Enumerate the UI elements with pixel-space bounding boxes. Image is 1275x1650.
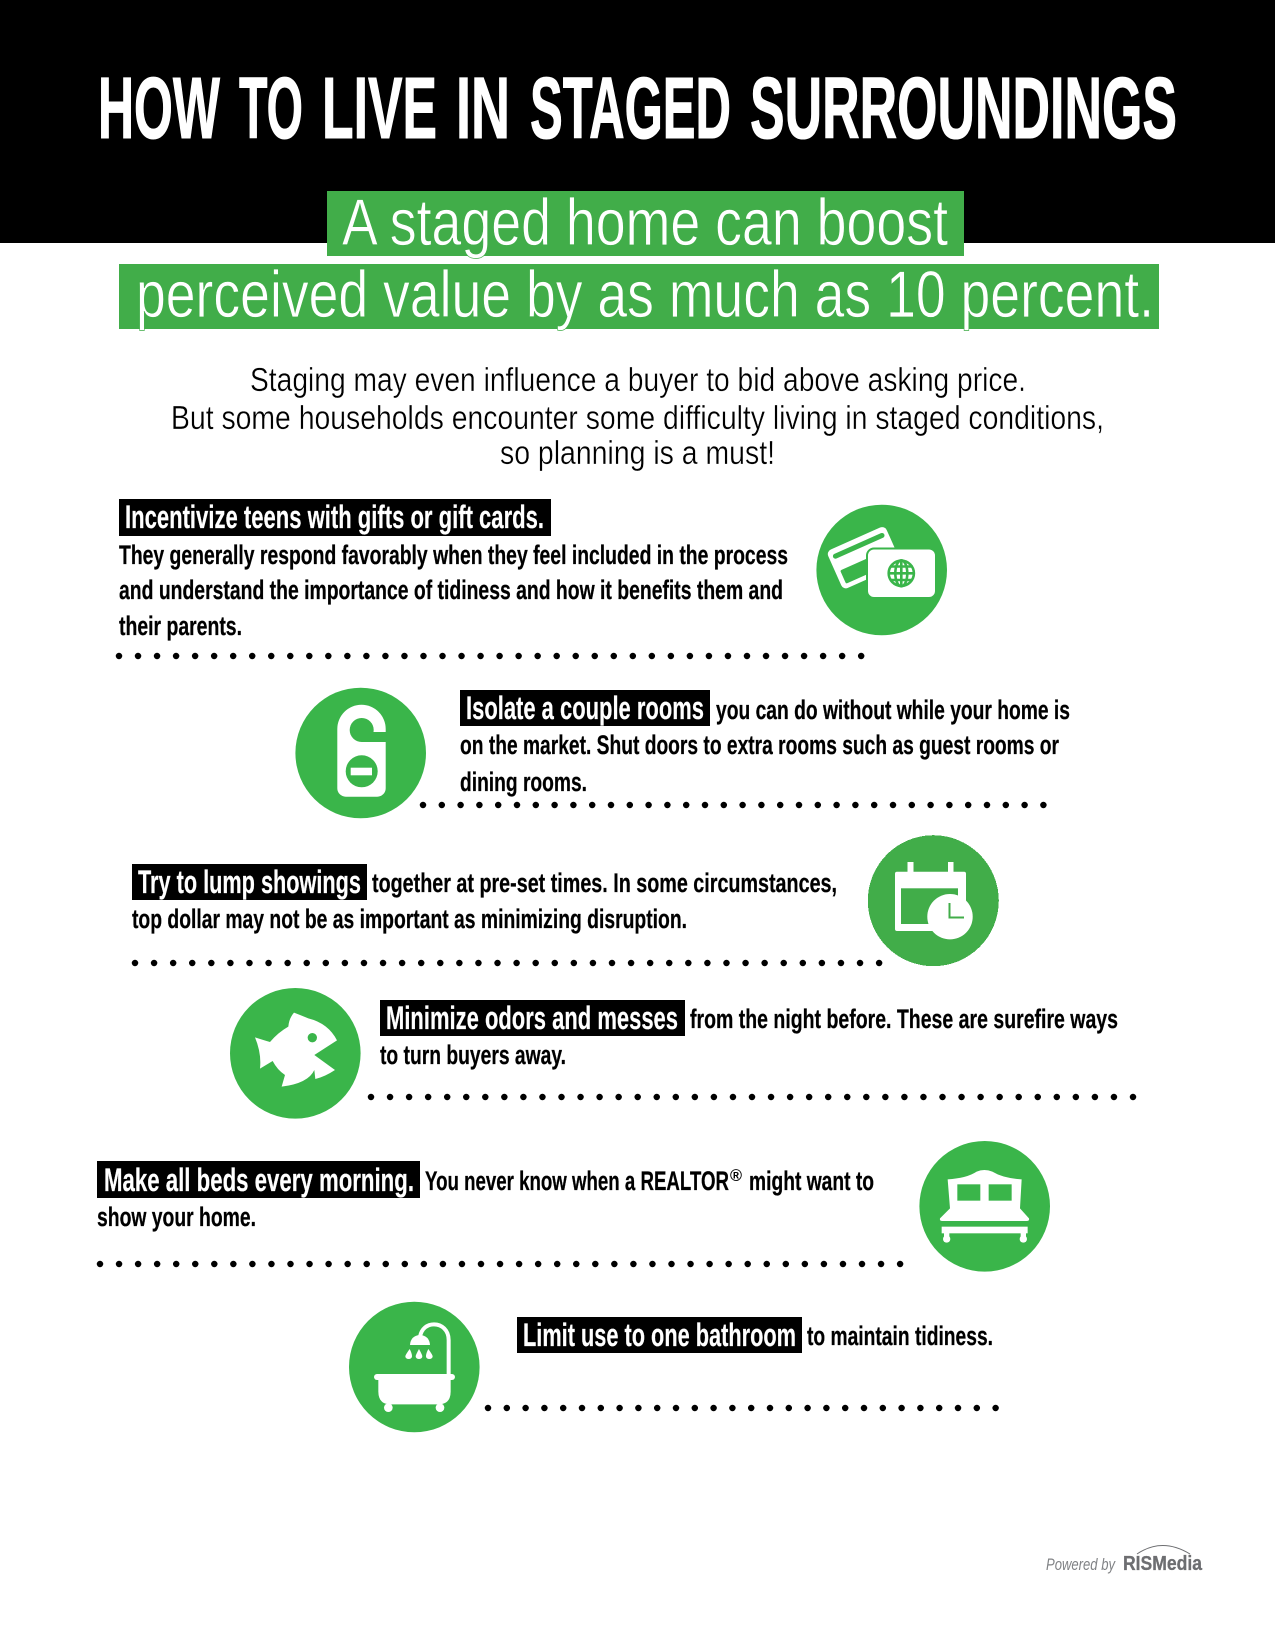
text: isolate rooms	[460, 695, 1070, 797]
dotted divider	[100, 1261, 901, 1267]
panel: one bathroom	[349, 1302, 997, 1432]
title: HOW	[98, 60, 221, 157]
intro text: Staging may even influence a buyer to bid above asking price.	[250, 361, 1026, 398]
panel: isolate rooms	[295, 688, 1070, 818]
header band	[0, 0, 1275, 243]
text: isolate rooms: dining rooms.	[460, 767, 587, 797]
dotted divider	[423, 802, 1045, 808]
dotted divider	[119, 653, 863, 659]
text: incentivize teens: their parents.	[119, 611, 242, 641]
panel: make beds	[97, 1141, 1050, 1272]
text: make beds: might want to	[749, 1166, 874, 1196]
icon: bed	[919, 1141, 1050, 1272]
text: incentivize teens: They generally respond favorably when they feel included in the process	[119, 540, 788, 570]
title: STAGED	[530, 60, 731, 157]
icon: gift cards	[816, 505, 947, 635]
heading: make beds	[97, 1161, 420, 1198]
title: IN	[456, 60, 510, 157]
text: incentivize teens	[119, 540, 788, 641]
text: make beds: You never know when a REALTOR	[425, 1166, 729, 1196]
heading: lump showings: Try to lump showings	[138, 864, 361, 900]
dotted divider	[135, 960, 880, 966]
footer logo: Powered by	[1046, 1555, 1116, 1574]
heading: isolate rooms	[460, 690, 710, 726]
text: make beds: show your home.	[97, 1202, 256, 1232]
subtitle callout: A staged home can boost	[342, 185, 948, 259]
icon: fish	[230, 988, 361, 1119]
text: incentivize teens: and understand the importance of tidiness and how it benefits them and	[119, 575, 783, 605]
text: isolate rooms: you can do without while your home is	[716, 695, 1070, 725]
text: lump showings: top dollar may not be as important as minimizing disruption.	[132, 904, 687, 934]
text: lump showings	[132, 868, 837, 934]
intro text	[171, 361, 1104, 471]
heading: minimize odors: Minimize odors and messes	[386, 1000, 678, 1036]
text: make beds: ®	[730, 1166, 742, 1185]
text: lump showings: together at pre-set times. In some circumstances,	[372, 868, 837, 898]
panel: incentivize teens	[119, 499, 947, 656]
dotted divider	[371, 1094, 1134, 1100]
panel: minimize odors	[230, 988, 1134, 1119]
heading: incentivize teens: Incentivize teens with gifts or gift cards.	[125, 499, 544, 535]
icon: calendar clock	[868, 835, 999, 966]
footer logo: RISMedia	[1123, 1553, 1203, 1575]
dotted divider	[488, 1405, 997, 1411]
text: one bathroom: to maintain tidiness.	[807, 1321, 993, 1351]
heading: incentivize teens	[119, 499, 551, 536]
heading: one bathroom	[517, 1317, 802, 1353]
text: minimize odors: from the night before. These are surefire ways	[690, 1004, 1118, 1034]
heading: make beds: Make all beds every morning.	[104, 1162, 414, 1198]
intro text: so planning is a must!	[500, 434, 775, 471]
icon: bathtub	[349, 1302, 480, 1432]
intro text: But some households encounter some difficulty living in staged conditions,	[171, 399, 1104, 436]
heading: one bathroom: Limit use to one bathroom	[523, 1317, 796, 1353]
panel: lump showings	[132, 835, 999, 966]
title: TO	[239, 60, 303, 157]
heading: minimize odors	[380, 1000, 685, 1036]
footer logo	[1046, 1546, 1203, 1575]
title	[98, 60, 1177, 157]
text: minimize odors	[380, 1004, 1118, 1070]
heading: lump showings	[132, 864, 367, 900]
subtitle callout	[119, 185, 1159, 331]
text: minimize odors: to turn buyers away.	[380, 1040, 566, 1070]
title: LIVE	[322, 60, 437, 157]
text: make beds	[97, 1166, 874, 1232]
heading: isolate rooms: Isolate a couple rooms	[466, 690, 704, 726]
icon: door hanger	[295, 688, 426, 818]
